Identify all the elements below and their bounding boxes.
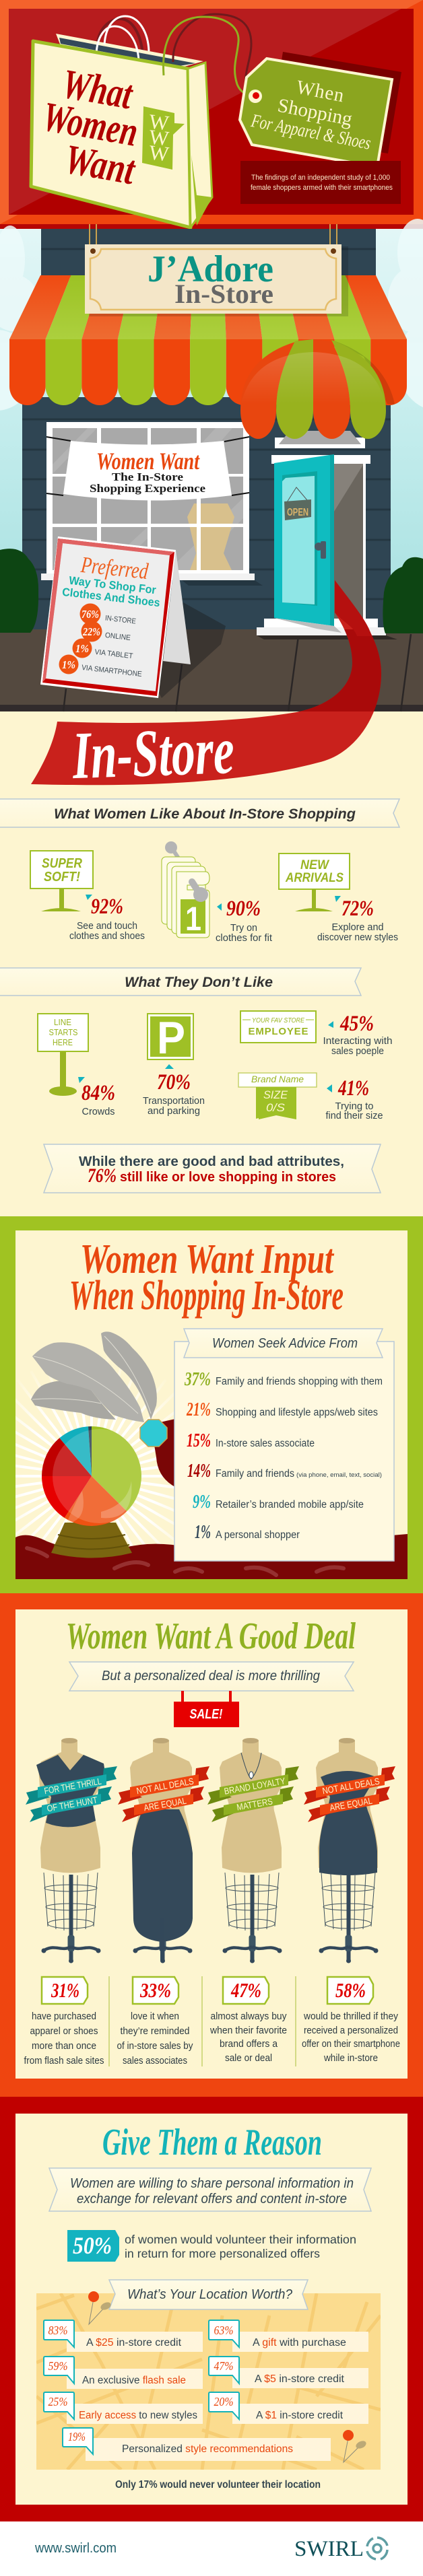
stat: parking 70%: Transportation: [143, 1096, 205, 1107]
sandwich board: preferred way to shop: VIA SMARTPHONE: [81, 664, 142, 678]
ribbon: willing to share: [49, 2168, 371, 2211]
sandwich board: preferred way to shop: IN-STORE: [104, 614, 136, 626]
stat: crowds 84%: HERE: [53, 1038, 73, 1047]
dress form 1: [26, 1738, 117, 1963]
stat: 47% brand: 47%: [230, 1978, 261, 2002]
stat: see and touch 92%: 92%: [91, 895, 123, 919]
item: 25% early access: 25%: [48, 2395, 67, 2408]
banner: summary: [44, 1144, 381, 1193]
stat: 58% personalized: 58%: [335, 1978, 366, 2002]
ribbon: location worth: What’s Your Location Worth?: [127, 2287, 293, 2302]
item: 47% $5 credit: 47%: [214, 2359, 233, 2373]
stat: 33% reminded: sales associates: [123, 2055, 187, 2066]
banner: women want: The In-Store: [112, 471, 184, 483]
sandwich board: preferred way to shop: Way To Shop For: [68, 574, 157, 596]
logo: swirl: SWIRL: [294, 2537, 364, 2561]
stat: explore 72%: Explore and: [331, 922, 384, 933]
stat: 31% flash sale: 31%: [51, 1978, 79, 2002]
stat: sales people 45%: YOUR FAV STORE: [252, 1017, 304, 1024]
stat: 31% flash sale: [24, 1977, 104, 2066]
icon: door handle: [315, 541, 326, 559]
stat: see and touch 92%: SUPER: [42, 856, 82, 871]
sandwich board: preferred way to shop: [40, 536, 226, 698]
hanging store sign: [85, 224, 348, 316]
dress form 4: NOT ALL DEALS: [321, 1776, 381, 1796]
stat: crowds 84%: 84%: [82, 1081, 115, 1105]
item: 20% $1 credit: 20%: [214, 2395, 233, 2408]
icon: map pin top: [88, 2291, 112, 2324]
stat: see and touch 92%: clothes and shoes: [69, 931, 145, 942]
dress form 3: BRAND LOYALTY: [223, 1776, 286, 1797]
stat: 33% reminded: 33%: [139, 1978, 171, 2002]
stat: size 41%: SIZE: [263, 1088, 288, 1101]
item: 19% style recommendations: Personalized style recommendations: [122, 2443, 293, 2455]
title: What Women Want: Women: [39, 94, 141, 155]
item: 20% $1 credit: [209, 2392, 368, 2424]
stat: sales people 45%: Interacting with: [323, 1036, 392, 1047]
ribbon: women seek advice from: Women Seek Advice From: [212, 1336, 358, 1351]
dress form 4: ARE EQUAL: [329, 1795, 373, 1813]
stat: see and touch 92%: SOFT!: [44, 870, 80, 884]
icon: WWW logo speech tag: [142, 106, 185, 170]
section: storefront illustration: [0, 219, 423, 793]
stat: 58% personalized: [302, 1977, 400, 2064]
stat: parking 70%: and parking: [148, 1106, 200, 1117]
door and entry: [257, 431, 397, 639]
panel: advice list: 15%: [187, 1430, 211, 1451]
section: women want a good deal: [0, 1593, 423, 2097]
sandwich board: preferred way to shop: 76%: [82, 608, 99, 621]
banner: summary: still like or love shopping in stores: [120, 1170, 336, 1185]
red carpet: [31, 580, 381, 793]
stat: try on 90%: clothes for fit: [216, 933, 272, 944]
item: 59% flash sale: 59%: [48, 2359, 67, 2373]
section: header: [0, 0, 423, 229]
section: women want input: [0, 1216, 423, 1597]
title: give them a reason: Give Them a Reason: [102, 2122, 322, 2163]
stat: crowds 84%: [38, 1014, 115, 1117]
stat: 47% brand: when their favorite: [209, 2025, 287, 2036]
ribbon: personalized deal: But a personalized deal is more thrilling: [102, 1669, 320, 1683]
title: What Women Want: Want: [61, 136, 139, 194]
stat: sales people 45%: sales poeple: [331, 1046, 384, 1057]
callout: study note: The findings of an independent study of 1,000: [251, 174, 390, 182]
stat: 58% personalized: while in-store: [323, 2052, 378, 2064]
panel: advice list: Family and friends: [216, 1468, 294, 1480]
item: 63% gift: A gift with purchase: [253, 2337, 346, 2348]
icon: hanging tag with string: For Apparel & Shoes: [249, 110, 372, 154]
stat: 50% volunteer: of women would volunteer their information: [125, 2233, 356, 2246]
stat: sales people 45%: [240, 1011, 392, 1057]
footer url: www.swirl.com: [34, 2541, 117, 2556]
icon: WWW logo speech tag: W: [148, 141, 170, 166]
ribbon: location worth: [109, 2280, 308, 2309]
item: 59% flash sale: [44, 2357, 203, 2389]
dress form 3: [207, 1738, 299, 1963]
banner: women want: Women Want: [96, 448, 200, 475]
stat: size 41%: 0/S: [266, 1101, 286, 1114]
icon: WWW logo speech tag: W: [148, 110, 170, 135]
stat: sales people 45%: EMPLOYEE: [248, 1026, 308, 1037]
hanging store sign: J’Adore: [148, 248, 273, 290]
icon: feathers: [31, 1331, 157, 1422]
stat: crowds 84%: STARTS: [48, 1028, 78, 1037]
ribbon: women seek advice from: [184, 1329, 383, 1358]
stat: 31% flash sale: from flash sale sites: [24, 2055, 104, 2066]
stat: parking 70%: [143, 1012, 205, 1117]
panel: advice list: In-store sales associate: [216, 1438, 315, 1449]
panel: advice list: [174, 1329, 394, 1561]
stat: 31% flash sale: apparel or shoes: [30, 2025, 98, 2037]
icon: map pin bottom: [343, 2430, 367, 2462]
item: 83% $25 credit: 83%: [48, 2324, 67, 2337]
crystal ball pie chart: [42, 1426, 147, 1558]
item: 63% gift: 63%: [214, 2324, 233, 2337]
sandwich board: preferred way to shop: VIA TABLET: [94, 648, 133, 660]
stat: explore 72%: ARRIVALS: [285, 871, 344, 885]
stat: explore 72%: NEW: [300, 858, 330, 872]
stat: size 41%: Brand Name: [251, 1074, 304, 1084]
stat: parking 70%: 70%: [157, 1070, 191, 1094]
stat: 31% flash sale: more than once: [32, 2040, 96, 2052]
panel: advice list: 14%: [187, 1460, 211, 1482]
stat: 33% reminded: [117, 1977, 193, 2066]
heading ribbon: what they don't like: [0, 968, 361, 996]
panel: advice list: 21%: [186, 1399, 211, 1420]
dress form 1: OF THE HUNT: [46, 1795, 98, 1813]
dress form 3: MATTERS: [236, 1796, 273, 1813]
stat: explore 72%: discover new styles: [317, 932, 398, 943]
stat: 50% volunteer: [67, 2230, 356, 2262]
stat: parking 70%: P: [157, 1012, 185, 1064]
ribbon: willing to share: exchange for relevant offers and content in-store: [77, 2192, 347, 2206]
panel: advice list: 37%: [184, 1368, 211, 1390]
dress form 2: [118, 1738, 209, 1963]
dome door awning: [240, 339, 395, 439]
stat: size 41%: 41%: [337, 1076, 369, 1101]
sandwich board: preferred way to shop: Clothes And Shoes: [61, 586, 161, 609]
stat: 50% volunteer: 50%: [73, 2232, 112, 2259]
stat: 50% volunteer: in return for more personalized offers: [125, 2247, 320, 2260]
heading ribbon: what they don't like: What They Don’t Like: [125, 975, 273, 990]
stat: try on 90%: 90%: [226, 897, 261, 921]
sandwich board: preferred way to shop: ONLINE: [104, 631, 131, 642]
hanging store sign: In-Store: [174, 279, 273, 309]
building facade: [22, 229, 391, 633]
dress form 2: NOT ALL DEALS: [135, 1776, 195, 1796]
icon: WWW logo speech tag: W: [148, 125, 170, 151]
panel: advice list: A personal shopper: [216, 1529, 300, 1541]
callout: study note: female shoppers armed with their smartphones: [251, 184, 393, 192]
banner: women want: Shopping Experience: [90, 482, 205, 495]
store window: [41, 422, 263, 586]
dress form 1: FOR THE THRILL: [43, 1776, 102, 1796]
item: 25% early access: [44, 2392, 203, 2424]
cloth: [15, 1419, 408, 1579]
title: What Women Want: [39, 61, 141, 194]
stat: size 41%: find their size: [326, 1111, 383, 1121]
stat: 47% brand: almost always buy: [210, 2011, 287, 2022]
banner: summary: While there are good and bad attributes,: [79, 1154, 344, 1169]
stat: size 41%: [238, 1073, 383, 1121]
stat: 33% reminded: love it when: [131, 2011, 179, 2022]
item: 83% $25 credit: A $25 in-store credit: [86, 2337, 182, 2348]
footer: [0, 2521, 423, 2576]
mannequin in window: [187, 503, 234, 570]
note: only 17%: Only 17% would never volunteer their location: [115, 2479, 321, 2491]
dress form 4: [304, 1738, 395, 1963]
heading ribbon: what women like: [0, 799, 399, 827]
map panel: [36, 2293, 381, 2470]
item: 19% style recommendations: [63, 2428, 331, 2461]
title: What Women Want: What: [59, 61, 137, 118]
stat: 47% brand: [209, 1977, 287, 2064]
icon: open sign: [284, 487, 311, 520]
banner: women want: [46, 437, 249, 501]
item: 59% flash sale: An exclusive flash sale: [82, 2375, 186, 2386]
awning: [9, 275, 407, 405]
heading ribbon: what women like: What Women Like About In-Store Shopping: [54, 806, 356, 822]
sandwich board: preferred way to shop: 1%: [75, 642, 89, 655]
stat: explore 72%: 72%: [341, 897, 374, 921]
panel: advice list: Retailer’s branded mobile app/site: [216, 1499, 364, 1510]
icon: fitting room hangers: 1: [185, 900, 201, 938]
stat: crowds 84%: LINE: [54, 1018, 71, 1027]
stat: 58% personalized: would be thrilled if they: [303, 2011, 398, 2022]
dress form 2: ARE EQUAL: [143, 1795, 187, 1813]
item: 47% $5 credit: [209, 2357, 368, 2388]
item: 63% gift: [209, 2320, 368, 2352]
stat: 47% brand: sale or deal: [225, 2052, 272, 2064]
stat: 58% personalized: received a personalized: [304, 2025, 398, 2036]
banner: summary: 76%: [88, 1164, 117, 1187]
stat: sales people 45%: 45%: [339, 1012, 374, 1036]
icon: open sign: OPEN: [287, 507, 308, 518]
stat: see and touch 92%: See and touch: [77, 921, 137, 932]
stat: 33% reminded: of in-store sales by: [117, 2040, 193, 2052]
stat: explore 72%: [279, 854, 398, 943]
sale sign: [174, 1691, 239, 1727]
title: women want input: Women Want Input: [80, 1237, 334, 1282]
sandwich board: preferred way to shop: 1%: [62, 658, 75, 671]
stat: try on 90%: [216, 897, 272, 944]
title: women want input: [69, 1237, 344, 1319]
stat: crowds 84%: Crowds: [82, 1107, 115, 1117]
panel: advice list: Family and friends shopping with them: [216, 1376, 383, 1387]
heading: In-Store: In-Store: [71, 713, 235, 793]
item: 19% style recommendations: 19%: [68, 2430, 86, 2443]
shrubs: [0, 549, 423, 633]
icon: hanging tag with string: Shopping: [276, 95, 354, 130]
item: 25% early access: Early access to new styles: [79, 2410, 197, 2421]
stat: 33% reminded: they’re reminded: [120, 2025, 190, 2037]
icon: hanging tag with string: When: [294, 76, 346, 107]
ribbon: willing to share: Women are willing to share personal information in: [70, 2176, 354, 2191]
sandwich board: preferred way to shop: Preferred: [79, 553, 150, 584]
stat: 58% personalized: offer on their smartphone: [302, 2038, 400, 2050]
stat: try on 90%: Try on: [230, 923, 257, 934]
item: 20% $1 credit: A $1 in-store credit: [256, 2410, 344, 2421]
sale sign: SALE!: [190, 1707, 223, 1722]
sandwich board: preferred way to shop: 22%: [82, 625, 100, 638]
item: 83% $25 credit: [44, 2320, 203, 2352]
ribbon: personalized deal: [69, 1662, 354, 1691]
icon: shopping bag: [31, 16, 212, 228]
section: give them a reason: [0, 2097, 423, 2521]
icon: hanging tag with string: [164, 14, 401, 167]
stat: see and touch 92%: [30, 851, 145, 942]
panel: advice list: 9%: [193, 1491, 211, 1512]
section: in-store: [0, 799, 399, 1193]
stat: 47% brand: brand offers a: [220, 2038, 278, 2050]
sidewalk: [0, 629, 423, 711]
panel: advice list: Shopping and lifestyle apps/web sites: [216, 1407, 378, 1418]
panel: advice list: (via phone, email, text, social): [296, 1471, 382, 1478]
stat: 31% flash sale: have purchased: [32, 2011, 96, 2022]
callout: study note: [240, 161, 401, 204]
item: 47% $5 credit: A $5 in-store credit: [255, 2373, 345, 2385]
stat: size 41%: Trying to: [335, 1101, 373, 1112]
panel: advice list: 1%: [195, 1521, 211, 1543]
icon: fitting room hangers: [162, 841, 209, 938]
icon: gem brooch: [140, 1420, 167, 1447]
